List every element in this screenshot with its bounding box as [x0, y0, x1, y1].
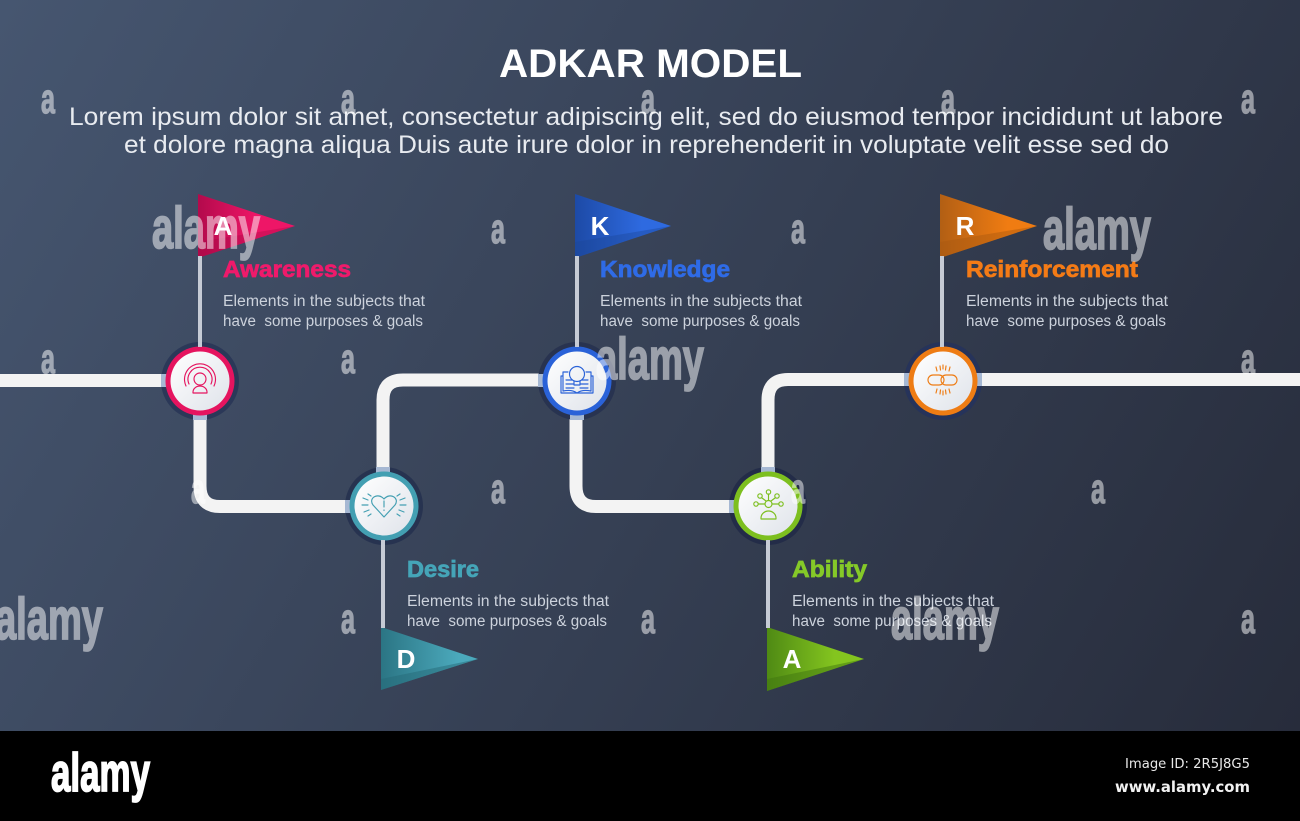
heading Desire: Desire: [407, 556, 479, 582]
node Ability: [729, 467, 807, 545]
watermarks: a: [491, 465, 505, 512]
description Desire: Elements in the subjects that: [407, 593, 610, 610]
flag K: K: [591, 211, 610, 241]
watermarks: a: [641, 595, 655, 642]
watermarks: a: [341, 335, 355, 382]
watermarks: alamy: [891, 587, 999, 652]
description Knowledge: have some purposes & goals: [600, 313, 800, 330]
heading Awareness: Awareness: [223, 256, 351, 282]
flag pole K: [575, 256, 579, 347]
icon: person with connected nodes: [754, 490, 783, 519]
watermarks: [0, 75, 1255, 652]
footer bar: [0, 731, 1300, 821]
icon: open book with bulb: [561, 366, 593, 393]
icon: heart with rays: [362, 494, 406, 517]
description Awareness: [223, 293, 426, 330]
icon: chain link: [928, 365, 957, 395]
flag A: [198, 194, 295, 258]
flag R: R: [956, 211, 975, 241]
description Reinforcement: [966, 293, 1169, 330]
website: www.alamy.com: [1115, 778, 1250, 796]
icon: person broadcasting: [184, 364, 216, 393]
watermarks: a: [41, 75, 55, 122]
flag D: D: [397, 644, 415, 674]
watermarks: a: [1091, 465, 1105, 512]
panel: Ability: [729, 467, 995, 691]
panel: Reinforcement: [904, 194, 1169, 420]
image id: Image ID: 2R5J8G5: [1125, 756, 1250, 772]
panel: Knowledge: [538, 194, 803, 420]
flag R: [940, 194, 1037, 258]
panel: Awareness: [161, 194, 426, 420]
description Ability: [792, 593, 995, 630]
flag pole A: [198, 256, 202, 347]
watermarks: a: [1241, 335, 1255, 382]
watermarks: a: [1241, 595, 1255, 642]
flag Ability: [767, 627, 864, 691]
description Reinforcement: Elements in the subjects that: [966, 293, 1169, 310]
watermarks: a: [791, 205, 805, 252]
panel: Desire: [345, 467, 610, 690]
footer logo: alamy: [51, 743, 150, 803]
flag pole Ability: [766, 540, 770, 628]
watermarks: a: [791, 465, 805, 512]
heading Reinforcement: Reinforcement: [966, 256, 1138, 282]
description Desire: [407, 593, 610, 630]
flag D: [381, 627, 478, 690]
flag K: [575, 194, 671, 258]
node Desire: [345, 467, 423, 545]
watermarks: a: [41, 335, 55, 382]
heading Ability: Ability: [792, 556, 867, 582]
flag A: A: [214, 211, 233, 241]
description Reinforcement: have some purposes & goals: [966, 313, 1166, 330]
watermarks: a: [941, 75, 955, 122]
intro text block: et dolore magna aliqua Duis aute irure dolor in reprehenderit in voluptate velit esse sed do: [124, 131, 1169, 159]
description Ability: Elements in the subjects that: [792, 593, 995, 610]
watermarks: alamy: [596, 327, 704, 392]
intro text block: Lorem ipsum dolor sit amet, consectetur adipiscing elit, sed do eiusmod tempor incididunt ut labore: [69, 103, 1223, 131]
watermarks: a: [641, 75, 655, 122]
description Awareness: Elements in the subjects that: [223, 293, 426, 310]
description Ability: have some purposes & goals: [792, 613, 992, 630]
node Awareness: [161, 342, 239, 420]
watermarks: a: [491, 205, 505, 252]
watermarks: alamy: [152, 196, 260, 261]
intro text block: [69, 103, 1223, 159]
flag pole D: [381, 540, 385, 628]
node Knowledge: [538, 342, 616, 420]
flag Ability: A: [783, 644, 802, 674]
heading Knowledge: Knowledge: [600, 256, 730, 282]
node Reinforcement: [904, 342, 982, 420]
watermarks: a: [1241, 75, 1255, 122]
description Desire: have some purposes & goals: [407, 613, 607, 630]
description Knowledge: [600, 293, 803, 330]
title: ADKAR MODEL: [499, 42, 802, 86]
watermarks: a: [191, 465, 205, 512]
description Awareness: have some purposes & goals: [223, 313, 423, 330]
watermarks: alamy: [1043, 197, 1151, 262]
watermarks: a: [341, 595, 355, 642]
flag pole R: [940, 256, 944, 347]
winding road path: [0, 380, 1300, 506]
description Knowledge: Elements in the subjects that: [600, 293, 803, 310]
watermarks: a: [341, 75, 355, 122]
